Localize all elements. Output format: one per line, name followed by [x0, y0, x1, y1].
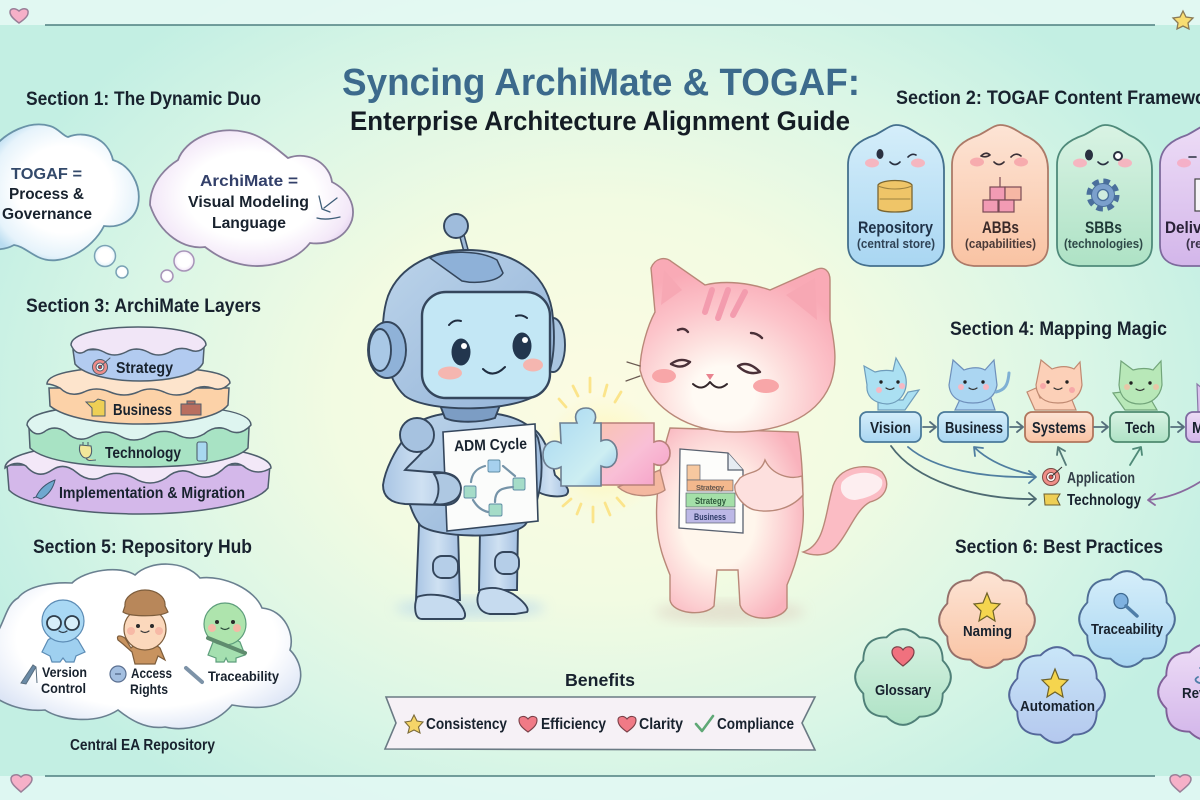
- panel: repository hub cloud: [0, 564, 301, 729]
- title: Enterprise Architecture Alignment Guide: [350, 106, 850, 136]
- panel: dynamic duo clouds: [0, 124, 353, 282]
- cat inner ears: [661, 270, 817, 320]
- icon: application target: [1042, 467, 1062, 486]
- character: version control: [42, 600, 85, 662]
- arrows: flow between nodes: [923, 422, 1184, 432]
- card: SBBs: [1057, 125, 1152, 266]
- illustration: puzzle glow: [541, 378, 665, 522]
- robot legs: [415, 525, 528, 619]
- badge: naming: [939, 572, 1035, 668]
- robot head plate: [430, 252, 503, 282]
- character: access rights: [117, 590, 168, 664]
- puzzle: pink piece: [601, 423, 670, 485]
- label: technology: Technology: [1067, 492, 1141, 509]
- node: vision: [860, 412, 921, 442]
- node: business: Business: [945, 420, 1003, 437]
- icon: target: [92, 358, 110, 374]
- card: SBBs: SBBs: [1085, 218, 1122, 237]
- badge: traceability: [1079, 571, 1175, 667]
- cat shadow: [655, 601, 805, 623]
- icon: document: [1195, 179, 1200, 211]
- panel: repository hub cloud: Access: [131, 665, 172, 681]
- icon: check: [696, 716, 713, 731]
- badge: glossary: [855, 629, 951, 725]
- title: [342, 62, 860, 136]
- badge: automation: [1009, 647, 1105, 743]
- cloud: TOGAF: TOGAF =: [11, 166, 82, 183]
- icon: top-right star: [1173, 11, 1193, 29]
- cloud: ArchiMate: ArchiMate =: [200, 173, 298, 190]
- cloud: TOGAF: [0, 124, 139, 278]
- badge: glossary: Glossary: [875, 682, 932, 699]
- robot antenna: [444, 214, 468, 258]
- icon: pencil: [21, 665, 37, 684]
- tier: technology: [27, 405, 251, 467]
- icon: technology folder: [1044, 494, 1060, 505]
- icon: rocket: [33, 480, 55, 499]
- icon: bottom-left heart: [11, 775, 32, 792]
- icon: top-left heart: [10, 9, 28, 23]
- robot near ear: [368, 322, 406, 378]
- tier: strategy: [71, 327, 206, 381]
- banner: benefits ribbon: Clarity: [639, 716, 683, 733]
- panel: ArchiMate layer cake: [5, 327, 271, 514]
- panel: best practice badges: [855, 571, 1200, 743]
- panel: repository hub cloud: Control: [41, 680, 86, 696]
- document: layers: Strategy: [696, 483, 725, 492]
- robot head: [383, 250, 554, 408]
- node: business: [938, 412, 1008, 442]
- puzzle pieces: [543, 408, 670, 486]
- node: tech: [1110, 412, 1169, 442]
- tier: strategy: Strategy: [116, 360, 173, 377]
- robot right arm: [532, 428, 568, 496]
- cat face: [626, 329, 779, 393]
- icon: phone: [197, 442, 207, 461]
- robot screen: [422, 292, 550, 398]
- heading: section 4: Section 4: Mapping Magic: [950, 319, 1167, 340]
- icon: heart: [618, 716, 636, 732]
- cat: business: [949, 360, 1009, 410]
- illustration: robot: [368, 214, 568, 619]
- card: ABBs: ABBs: [982, 218, 1019, 237]
- icon: folder: [86, 399, 105, 416]
- cloud: TOGAF: Governance: [2, 206, 92, 223]
- badge: review: [1158, 644, 1200, 740]
- panel: TOGAF content framework cards: [848, 125, 1200, 266]
- card: repository: Repository: [858, 218, 933, 237]
- icon: drawing tool: [317, 196, 340, 219]
- cat tail: [803, 467, 887, 555]
- robot neck: [440, 405, 500, 422]
- cloud: ArchiMate: Language: [212, 215, 286, 232]
- character: traceability: [204, 603, 246, 662]
- card: ABBs: [952, 125, 1048, 266]
- tier: business: [47, 367, 230, 424]
- icon: star: [405, 715, 423, 733]
- icon: plug: [79, 442, 96, 460]
- label: central EA repository: Central EA Repository: [70, 737, 215, 754]
- robot face: [438, 315, 543, 380]
- icon: chain link: [186, 668, 202, 682]
- panel: repository hub cloud: Version: [42, 664, 87, 680]
- node: systems: [1025, 412, 1093, 442]
- robot left arm: [383, 418, 461, 505]
- heading: section 3: Section 3: ArchiMate Layers: [26, 296, 261, 317]
- cat: tech: [1113, 361, 1162, 410]
- document: ADM cycle: [443, 424, 538, 531]
- illustration: cat: [618, 259, 887, 623]
- panel: mapping magic flow: [860, 358, 1200, 509]
- cat: migration: [1197, 384, 1200, 412]
- heading: section 6: Section 6: Best Practices: [955, 537, 1163, 558]
- puzzle: blue piece: [543, 408, 617, 486]
- icon: gear: [1090, 182, 1116, 208]
- node: tech: Tech: [1125, 420, 1155, 437]
- cat body: [657, 428, 803, 618]
- label: application: Application: [1067, 470, 1135, 487]
- tier: business: Business: [113, 402, 172, 419]
- cloud: ArchiMate: [150, 130, 353, 282]
- cloud: TOGAF: Process &: [9, 186, 84, 203]
- banner: benefits ribbon: Compliance: [717, 716, 794, 733]
- banner: benefits ribbon: Consistency: [426, 716, 507, 733]
- badge: naming: Naming: [963, 623, 1012, 640]
- cat right arm: [735, 460, 803, 511]
- badge: traceability: Traceability: [1091, 622, 1163, 638]
- cat: systems: [1027, 360, 1082, 410]
- cat left paw: [618, 470, 665, 496]
- card: repository: (central store): [857, 237, 935, 251]
- panel: repository hub cloud: Rights: [130, 681, 168, 697]
- banner: benefits ribbon: [385, 697, 815, 750]
- icon: access token: [110, 666, 126, 682]
- robot shadow: [395, 598, 545, 618]
- badge: automation: Automation: [1020, 698, 1095, 715]
- tier: technology: Technology: [105, 445, 181, 462]
- card: repository: [848, 125, 944, 266]
- document: layers: Strategy: [695, 496, 726, 506]
- icon: heart: [519, 716, 537, 732]
- title: Syncing ArchiMate & TOGAF:: [342, 62, 860, 104]
- node: vision: Vision: [870, 420, 911, 437]
- robot torso: [403, 412, 542, 536]
- tier: implementation and migration: [5, 443, 271, 514]
- card: SBBs: (technologies): [1064, 237, 1143, 251]
- icon: bottom-right heart: [1170, 775, 1191, 792]
- tier: implementation and migration: Implementation & Migration: [59, 485, 245, 502]
- node: migration: [1186, 412, 1200, 442]
- cat stripes: [705, 290, 745, 318]
- cat: vision: [864, 358, 919, 410]
- cloud: ArchiMate: Visual Modeling: [188, 194, 309, 211]
- robot far ear: [541, 318, 565, 372]
- cat head: [640, 259, 835, 432]
- panel: repository hub cloud: Traceability: [208, 668, 279, 684]
- icon: database box: [878, 180, 912, 212]
- icon: briefcase: [181, 401, 201, 415]
- arrows: mapping curves: [891, 446, 1200, 505]
- icon: building blocks: [983, 177, 1021, 212]
- node: systems: Systems: [1032, 420, 1086, 437]
- heading: section 1: Section 1: The Dynamic Duo: [26, 89, 261, 110]
- card: deliverables: [1160, 125, 1200, 266]
- banner: benefits ribbon: Efficiency: [541, 716, 606, 733]
- document: layers: Business: [694, 512, 726, 522]
- document: ADM cycle: ADM Cycle: [454, 436, 528, 455]
- document: layers: [679, 449, 743, 533]
- heading: section 5: Section 5: Repository Hub: [33, 537, 252, 558]
- heading: benefits: Benefits: [565, 670, 635, 690]
- card: ABBs: (capabilities): [965, 237, 1036, 251]
